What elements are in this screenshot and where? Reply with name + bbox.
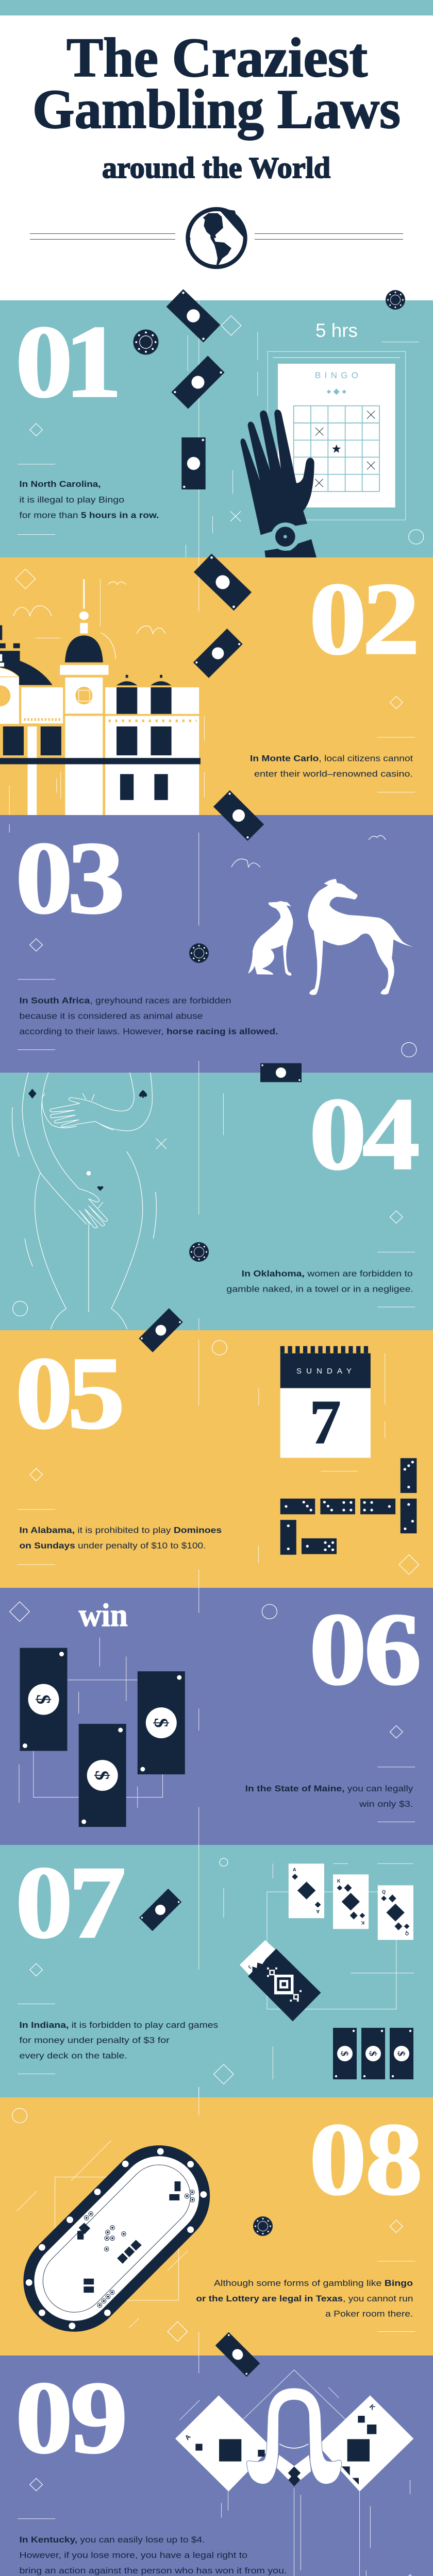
icon: calendar: 7 (309, 1387, 341, 1457)
dollar bill 1 (20, 1648, 67, 1751)
bill (139, 1889, 181, 1931)
text: law 2: In Monte Carlo , local citizens cannot (250, 754, 413, 764)
dollar bill 3 (138, 1671, 185, 1774)
bill crossing panels (215, 2332, 260, 2377)
panel: 06 Maine: win only $3. (359, 1799, 413, 1809)
bills falling (166, 289, 225, 489)
small bill 1: $ (339, 2051, 350, 2056)
icon: hand with watch (241, 410, 317, 557)
panel: 05 Alabama (0, 1308, 433, 1588)
illustration: poker table (3, 2124, 231, 2353)
panel: 05 Alabama: on Sundays under penalty of $10 to $100. (20, 1541, 206, 1551)
chips (133, 290, 405, 355)
panel: 04 Oklahoma women: gamble naked, in a towel or in a negligee. (226, 1284, 413, 1294)
icon: spade (139, 1090, 147, 1098)
left card (175, 2395, 272, 2492)
text: law 4: In Oklahoma, women are forbidden to (242, 1269, 413, 1279)
illustration: playing cards: K (337, 1878, 341, 1884)
text: law 1: In North Carolina, (20, 479, 101, 489)
bingo card (268, 351, 406, 520)
illustration: playing cards: K (361, 1920, 364, 1925)
word: win: win (79, 1597, 128, 1633)
panel: 09 Kentucky: bring an action against the person who has won it from you. (20, 2566, 287, 2575)
small bill 1 (333, 2028, 357, 2079)
title line 1: The Craziest (66, 27, 368, 89)
bill falling (213, 790, 264, 841)
chip (253, 2216, 273, 2236)
panel: 07 Indiana: for money under penalty of $3 for (20, 2035, 170, 2045)
dollar bill 1: $ (32, 1694, 54, 1704)
icon: calendar (280, 1350, 371, 1458)
panel: 08 Texas: a Poker room there. (325, 2309, 413, 2319)
right card (318, 2395, 413, 2492)
bill crossing panels (139, 1308, 183, 1352)
icon: heart (97, 1186, 104, 1191)
centre card (277, 2455, 311, 2485)
icon: standing dog (308, 879, 413, 995)
number 05: 05 (15, 1336, 125, 1450)
icon: calendar: SUNDAY (296, 1367, 352, 1376)
illustration: line-art figure (12, 1073, 156, 1329)
illustration: cards and moustache: K (368, 2403, 377, 2412)
dollar bill 2: $ (91, 1770, 113, 1781)
small bill 2 (361, 2028, 385, 2079)
panel: 03 South Africa: according to their laws. However, horse racing is allowed. (20, 1027, 278, 1037)
illustration: casino building (0, 579, 201, 815)
illustration: playing cards: Q (382, 1889, 386, 1894)
bingo word: BINGO (315, 370, 358, 380)
panel: 01 North Carolina: it is illegal to play Bingo (20, 495, 124, 505)
chip (189, 943, 209, 963)
text: law 9: In Kentucky, you can easily lose up to $4. (20, 2535, 205, 2545)
number 04: 04 (309, 1077, 420, 1191)
icon: globe (188, 209, 245, 267)
dollar bill 3: $ (150, 1718, 172, 1728)
number 06: 06 (309, 1592, 422, 1706)
illustration: playing cards: J (247, 1964, 253, 1970)
panel: 09 Kentucky: However, if you lose more, you have a legal right to (20, 2550, 247, 2560)
illustration: playing cards (240, 1863, 413, 2021)
label: 5 hrs: 5 hrs (315, 320, 358, 341)
icon: small dollar bills (333, 2028, 413, 2079)
illustration: cards and moustache: A (184, 2432, 192, 2442)
number 03: 03 (15, 821, 125, 935)
panel: 06 Maine (0, 1569, 433, 1855)
small bill 2: $ (367, 2051, 378, 2056)
title line 2: Gambling Laws (32, 79, 401, 140)
panel: 07 Indiana (0, 1845, 433, 2097)
bills falling (193, 554, 252, 678)
icon: dominoes (280, 1458, 417, 1555)
panel: 08 Texas (0, 2087, 433, 2355)
title line 3: around the World (102, 151, 330, 184)
chip (189, 1242, 209, 1262)
dollar bill 2 (79, 1724, 126, 1827)
panel: 03 South Africa: because it is considered as animal abuse (20, 1011, 203, 1021)
text: law 8: Although some forms of gambling like Bingo (214, 2278, 413, 2288)
panel: 09 Kentucky (0, 2332, 433, 2576)
panel: 01 North Carolina: for more than 5 hours in a row. (20, 511, 159, 520)
text: law 6: In the State of Maine, you can legally (245, 1784, 413, 1793)
panel: 01 North Carolina (0, 289, 433, 612)
text: law 3: In South Africa , greyhound races are forbidden (20, 996, 231, 1006)
panel: 02 Monte Carlo (0, 554, 433, 824)
panel: 07 Indiana: every deck on the table. (20, 2050, 127, 2060)
title block: header (30, 27, 403, 267)
panel: 08 Texas: or the Lottery are legal in Texas , you cannot run (196, 2294, 413, 2303)
illustration: cards and moustache (175, 2388, 413, 2492)
icon: diamond (28, 1089, 37, 1098)
illustration: playing cards: A (293, 1867, 296, 1872)
number 07: 07 (15, 1845, 126, 1959)
icon: moustache (246, 2388, 342, 2484)
panel: 03 South Africa (0, 790, 433, 1073)
top colour band (0, 0, 433, 15)
illustration: playing cards: A (316, 1909, 320, 1914)
number 02: 02 (309, 562, 420, 676)
number 01: 01 (15, 304, 122, 419)
bill crossing panels (260, 1063, 302, 1082)
number 08: 08 (309, 2102, 423, 2216)
small bill 3 (390, 2028, 413, 2079)
small bill 3: $ (395, 2051, 407, 2056)
text: law 7: In Indiana, it is forbidden to play card games (20, 2020, 218, 2030)
text: law 5: In Alabama, it is prohibited to play Dominoes (20, 1526, 222, 1535)
icon: dollar bills (20, 1648, 185, 1827)
number 09: 09 (15, 2361, 128, 2475)
icon: sitting dog (248, 901, 293, 976)
panel: 02 Monte Carlo: enter their world–renowned casino. (254, 769, 413, 779)
illustration: playing cards: Q (405, 1931, 409, 1936)
panel: 04 Oklahoma women (0, 1061, 433, 1340)
illustration: greyhounds (248, 879, 413, 995)
